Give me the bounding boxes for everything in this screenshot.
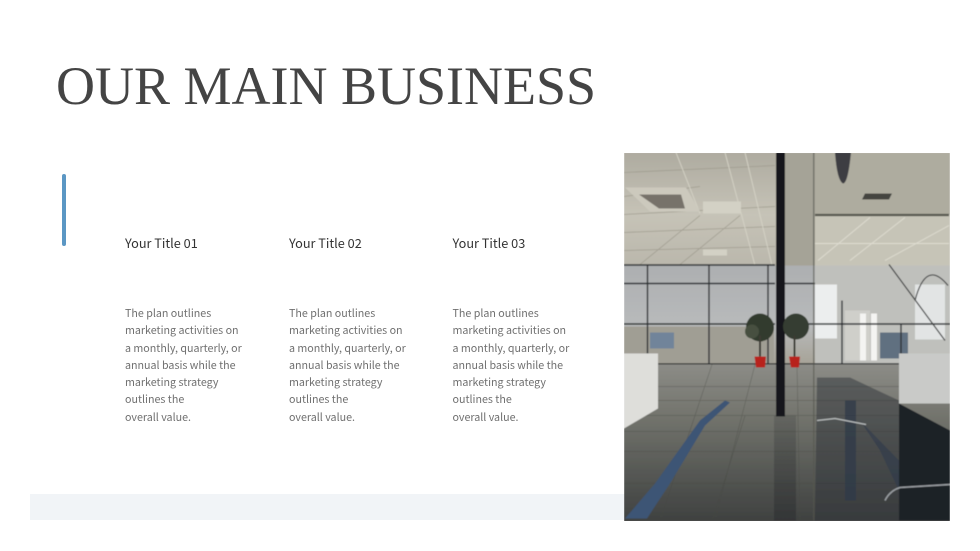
accent bar [62,174,66,246]
column 1 text: overall value. [125,410,191,425]
column 3 text: overall value. [452,410,518,425]
column 1 text: The plan outlines [125,306,211,321]
column 1 text: marketing strategy [125,375,218,390]
column [776,152,785,416]
left plant [745,313,774,367]
right desk [885,353,950,520]
office photo [624,153,950,521]
column 2 text: marketing strategy [289,375,382,390]
column 3 text: marketing activities on [452,323,566,338]
column 3 [452,233,570,425]
ceiling [624,152,950,265]
title: OUR MAIN BUSINESS [56,56,596,116]
column 3 text [452,306,570,425]
column 2 text: a monthly, quarterly, or [289,341,406,356]
column 2 title: Your Title 02 [289,233,362,252]
column 3 text: marketing strategy [452,375,546,390]
column 1 text [125,306,242,425]
floor [624,364,950,521]
column 2 text: overall value. [289,410,355,425]
column 2 text: The plan outlines [289,306,375,321]
column 3 text: annual basis while the [452,358,563,373]
column 3 title: Your Title 03 [452,233,525,252]
left white cabinet [624,353,658,428]
column 3 text: The plan outlines [452,306,539,321]
column 3 text: a monthly, quarterly, or [452,341,569,356]
column 1 [125,233,242,425]
column 1 text: outlines the [125,392,184,407]
column 2 text: marketing activities on [289,323,403,338]
column 1 text: a monthly, quarterly, or [125,341,242,356]
photo scene [624,152,950,521]
ceiling AC unit [625,187,700,211]
column 1 text: annual basis while the [125,358,236,373]
right plant [783,313,809,367]
footer band [30,494,625,520]
column 2 text: outlines the [289,392,348,407]
column 1 title: Your Title 01 [125,233,198,252]
column 3 text: outlines the [452,392,512,407]
column 2 [289,233,406,425]
windows [624,264,950,365]
column 1 text: marketing activities on [125,323,239,338]
column 2 text [289,306,406,425]
column 2 text: annual basis while the [289,358,400,373]
glass edge [813,152,814,520]
